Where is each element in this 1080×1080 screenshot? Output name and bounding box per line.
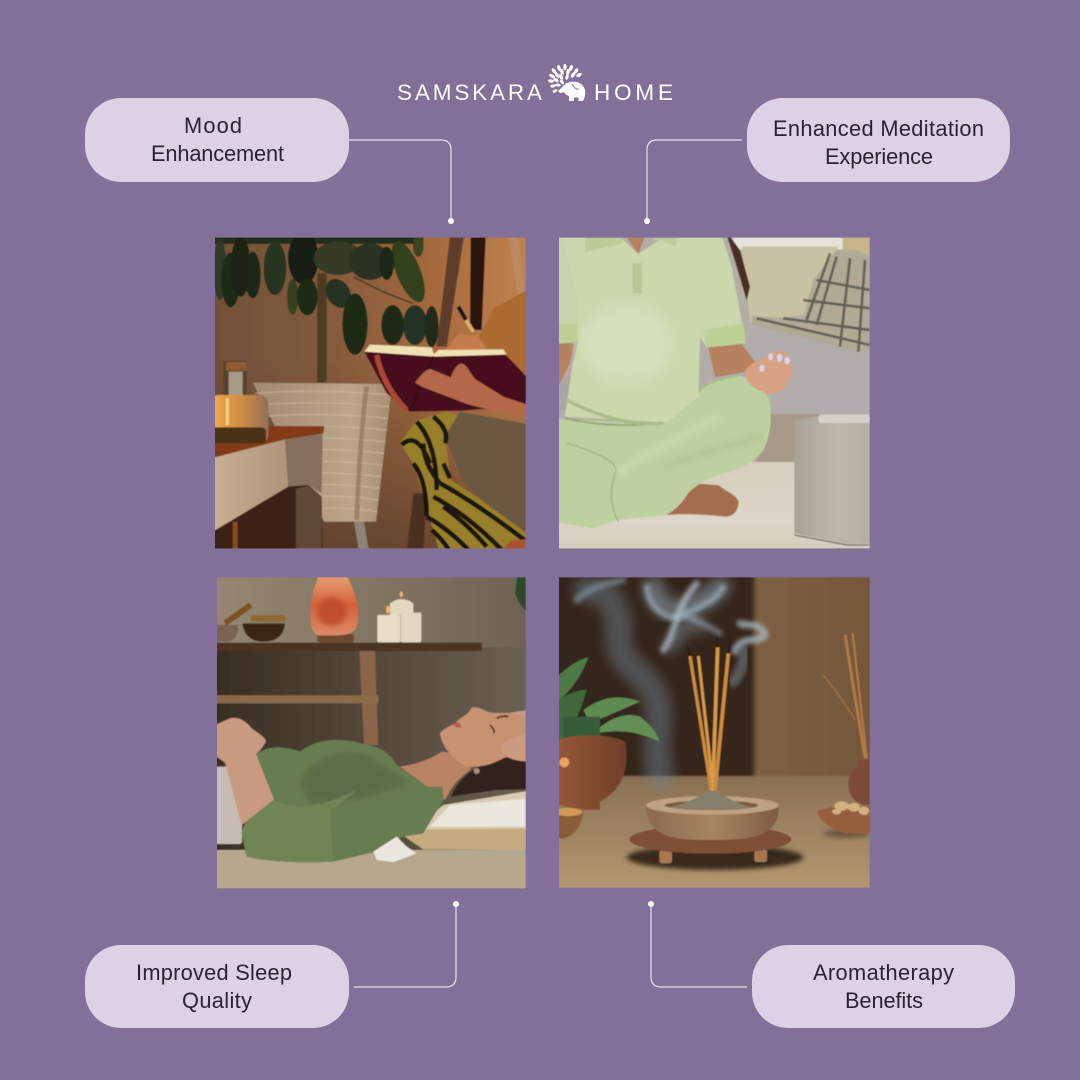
table surface bbox=[543, 776, 887, 899]
logo: Samskara Home bbox=[397, 64, 673, 105]
right side vase, sticks and nuts bbox=[817, 633, 880, 838]
open book bbox=[364, 345, 533, 412]
small bowl left bbox=[550, 808, 583, 838]
callout: Mood Enhancement: Mood bbox=[184, 113, 242, 138]
stand shadow bbox=[627, 845, 803, 870]
person sleeve and trousers bbox=[447, 290, 526, 532]
callout: Aromatherapy Benefits: Benefits bbox=[845, 988, 923, 1013]
foot bbox=[667, 483, 739, 517]
candles bbox=[377, 591, 421, 642]
potted plant bbox=[550, 657, 659, 810]
connector: meditation bbox=[644, 140, 742, 224]
callout: Improved Sleep Quality bbox=[85, 945, 349, 1028]
logo icon: tree and elephant bbox=[548, 64, 585, 101]
plant bbox=[210, 230, 439, 383]
connector: mood bbox=[349, 140, 454, 224]
plant corner bbox=[514, 577, 526, 611]
hair bbox=[450, 757, 526, 797]
shelf bbox=[210, 643, 482, 745]
lower hand bbox=[415, 364, 533, 423]
hair bbox=[726, 238, 750, 300]
pen bbox=[458, 307, 473, 332]
zebra blanket bbox=[400, 412, 533, 553]
callout: Enhanced Meditation Experience: Experience bbox=[825, 144, 933, 169]
connector: sleep bbox=[354, 901, 459, 987]
tassel bbox=[373, 837, 417, 862]
sofa and cushions bbox=[550, 230, 880, 462]
callout: Aromatherapy Benefits: Aromatherapy bbox=[813, 960, 954, 985]
green blouse bbox=[242, 740, 443, 862]
callout: Enhanced Meditation Experience bbox=[747, 98, 1010, 182]
face bbox=[440, 707, 533, 767]
wooden plate bbox=[629, 825, 791, 863]
practitioner hand bbox=[501, 710, 526, 762]
facial features bbox=[453, 716, 508, 774]
singing bowls bbox=[210, 605, 286, 642]
pillow bbox=[405, 790, 533, 850]
mudra hand bbox=[745, 351, 792, 394]
carpet bbox=[559, 462, 870, 548]
photo: woman journaling by candle bbox=[210, 230, 533, 553]
callout: Mood Enhancement bbox=[85, 98, 349, 182]
blanket behind arm bbox=[217, 766, 243, 845]
arms bbox=[559, 238, 756, 386]
connector: aromatherapy bbox=[648, 901, 747, 987]
shade / pot bbox=[253, 383, 392, 553]
salt lamp bbox=[311, 575, 358, 642]
shirt bbox=[550, 230, 746, 424]
photo: woman meditating in sage outfit bbox=[559, 238, 870, 548]
callout: Enhanced Meditation Experience: Enhanced Meditation bbox=[773, 116, 984, 141]
photo: incense sticks with smoke bbox=[543, 563, 887, 900]
plaid blanket bbox=[752, 249, 880, 355]
candle lantern bbox=[210, 361, 268, 443]
humidifier bbox=[794, 414, 880, 545]
easel legs bbox=[407, 230, 525, 553]
callout: Improved Sleep Quality: Improved Sleep bbox=[136, 960, 292, 985]
table bbox=[210, 426, 324, 553]
upper hand bbox=[445, 334, 487, 350]
callout: Mood Enhancement: Enhancement bbox=[151, 141, 284, 166]
callout: Aromatherapy Benefits bbox=[752, 945, 1015, 1028]
callout: Improved Sleep Quality: Quality bbox=[182, 988, 252, 1013]
clasped hands and arm bbox=[210, 718, 274, 825]
incense bowl bbox=[646, 792, 779, 840]
incense sticks bbox=[688, 637, 731, 791]
logo wordmark left: SAMSKARA bbox=[397, 80, 542, 105]
photo: woman resting on floor bbox=[210, 570, 533, 893]
logo wordmark right: HOME bbox=[594, 80, 673, 105]
carpet floor bbox=[217, 849, 526, 888]
trousers bbox=[550, 375, 771, 528]
smoke bbox=[577, 580, 765, 777]
neck bbox=[400, 752, 477, 800]
